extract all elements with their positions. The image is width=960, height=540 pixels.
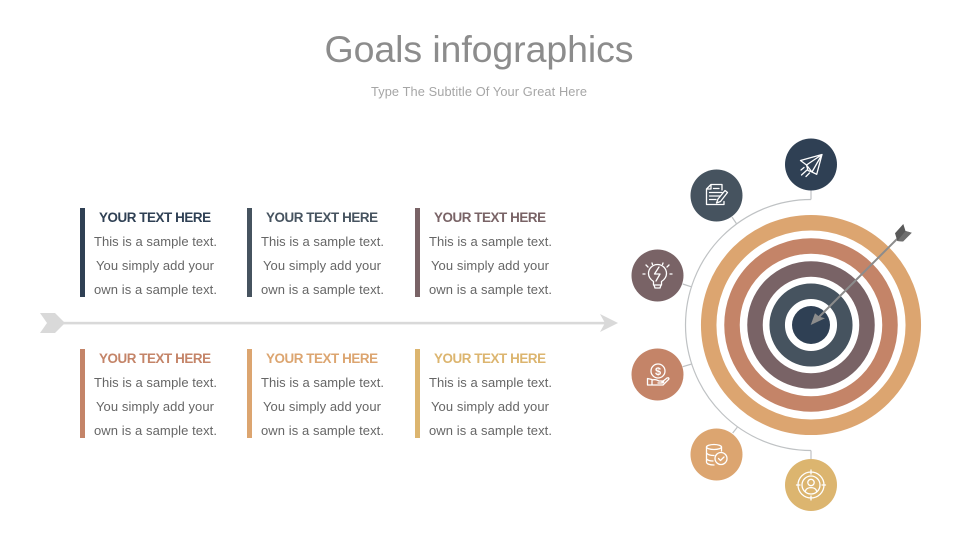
panel: bottom text 3: You simply add your: [431, 399, 550, 414]
panel: top text 1: own is a sample text.: [94, 282, 217, 297]
panel: top text 3: [415, 208, 552, 297]
panel: top text 3: This is a sample text.: [429, 234, 552, 249]
panel: bottom text 2: This is a sample text.: [261, 375, 384, 390]
panel: top text 1: YOUR TEXT HERE: [99, 210, 211, 225]
panel: bottom text 1: This is a sample text.: [94, 375, 217, 390]
panel: bottom text 1: You simply add your: [96, 399, 215, 414]
panel: bottom text 1: own is a sample text.: [94, 423, 217, 438]
panel: bottom text 1: [80, 349, 217, 438]
icon: light bulb: [632, 250, 684, 302]
panel: bottom text 3: This is a sample text.: [429, 375, 552, 390]
panel: top text 2: You simply add your: [263, 258, 382, 273]
icon: paper plane: [785, 138, 837, 190]
panel: top text 1: You simply add your: [96, 258, 215, 273]
panel: bottom text 2: [247, 349, 384, 438]
icon: database with check: [690, 428, 742, 480]
panel: bottom text 1: YOUR TEXT HERE: [99, 351, 211, 366]
panel: top text 2: YOUR TEXT HERE: [266, 210, 378, 225]
title: Goals infographics: [324, 28, 634, 70]
connector arc: [683, 190, 811, 460]
panel: bottom text 2: own is a sample text.: [261, 423, 384, 438]
panel: top text 3: You simply add your: [431, 258, 550, 273]
panel: top text 3: own is a sample text.: [429, 282, 552, 297]
panel: top text 1: [80, 208, 217, 297]
panel: bottom text 2: YOUR TEXT HERE: [266, 351, 378, 366]
panel: top text 2: [247, 208, 384, 297]
icon: hand with coin: $: [655, 366, 661, 378]
panel: bottom text 3: own is a sample text.: [429, 423, 552, 438]
panel: top text 3: YOUR TEXT HERE: [434, 210, 546, 225]
panel: bottom text 3: [415, 349, 552, 438]
icon: arrow in target: [811, 224, 912, 325]
icon: person in crosshair: [785, 459, 837, 511]
subtitle: Type The Subtitle Of Your Great Here: [371, 84, 587, 99]
icon: hand with coin: [632, 348, 684, 400]
panel: top text 1: This is a sample text.: [94, 234, 217, 249]
panel: bottom text 3: YOUR TEXT HERE: [434, 351, 546, 366]
target rings: [709, 223, 913, 427]
panel: top text 2: This is a sample text.: [261, 234, 384, 249]
icon: document and pen: [690, 170, 742, 222]
panel: top text 2: own is a sample text.: [261, 282, 384, 297]
timeline arrow: [40, 313, 618, 333]
panel: bottom text 2: You simply add your: [263, 399, 382, 414]
